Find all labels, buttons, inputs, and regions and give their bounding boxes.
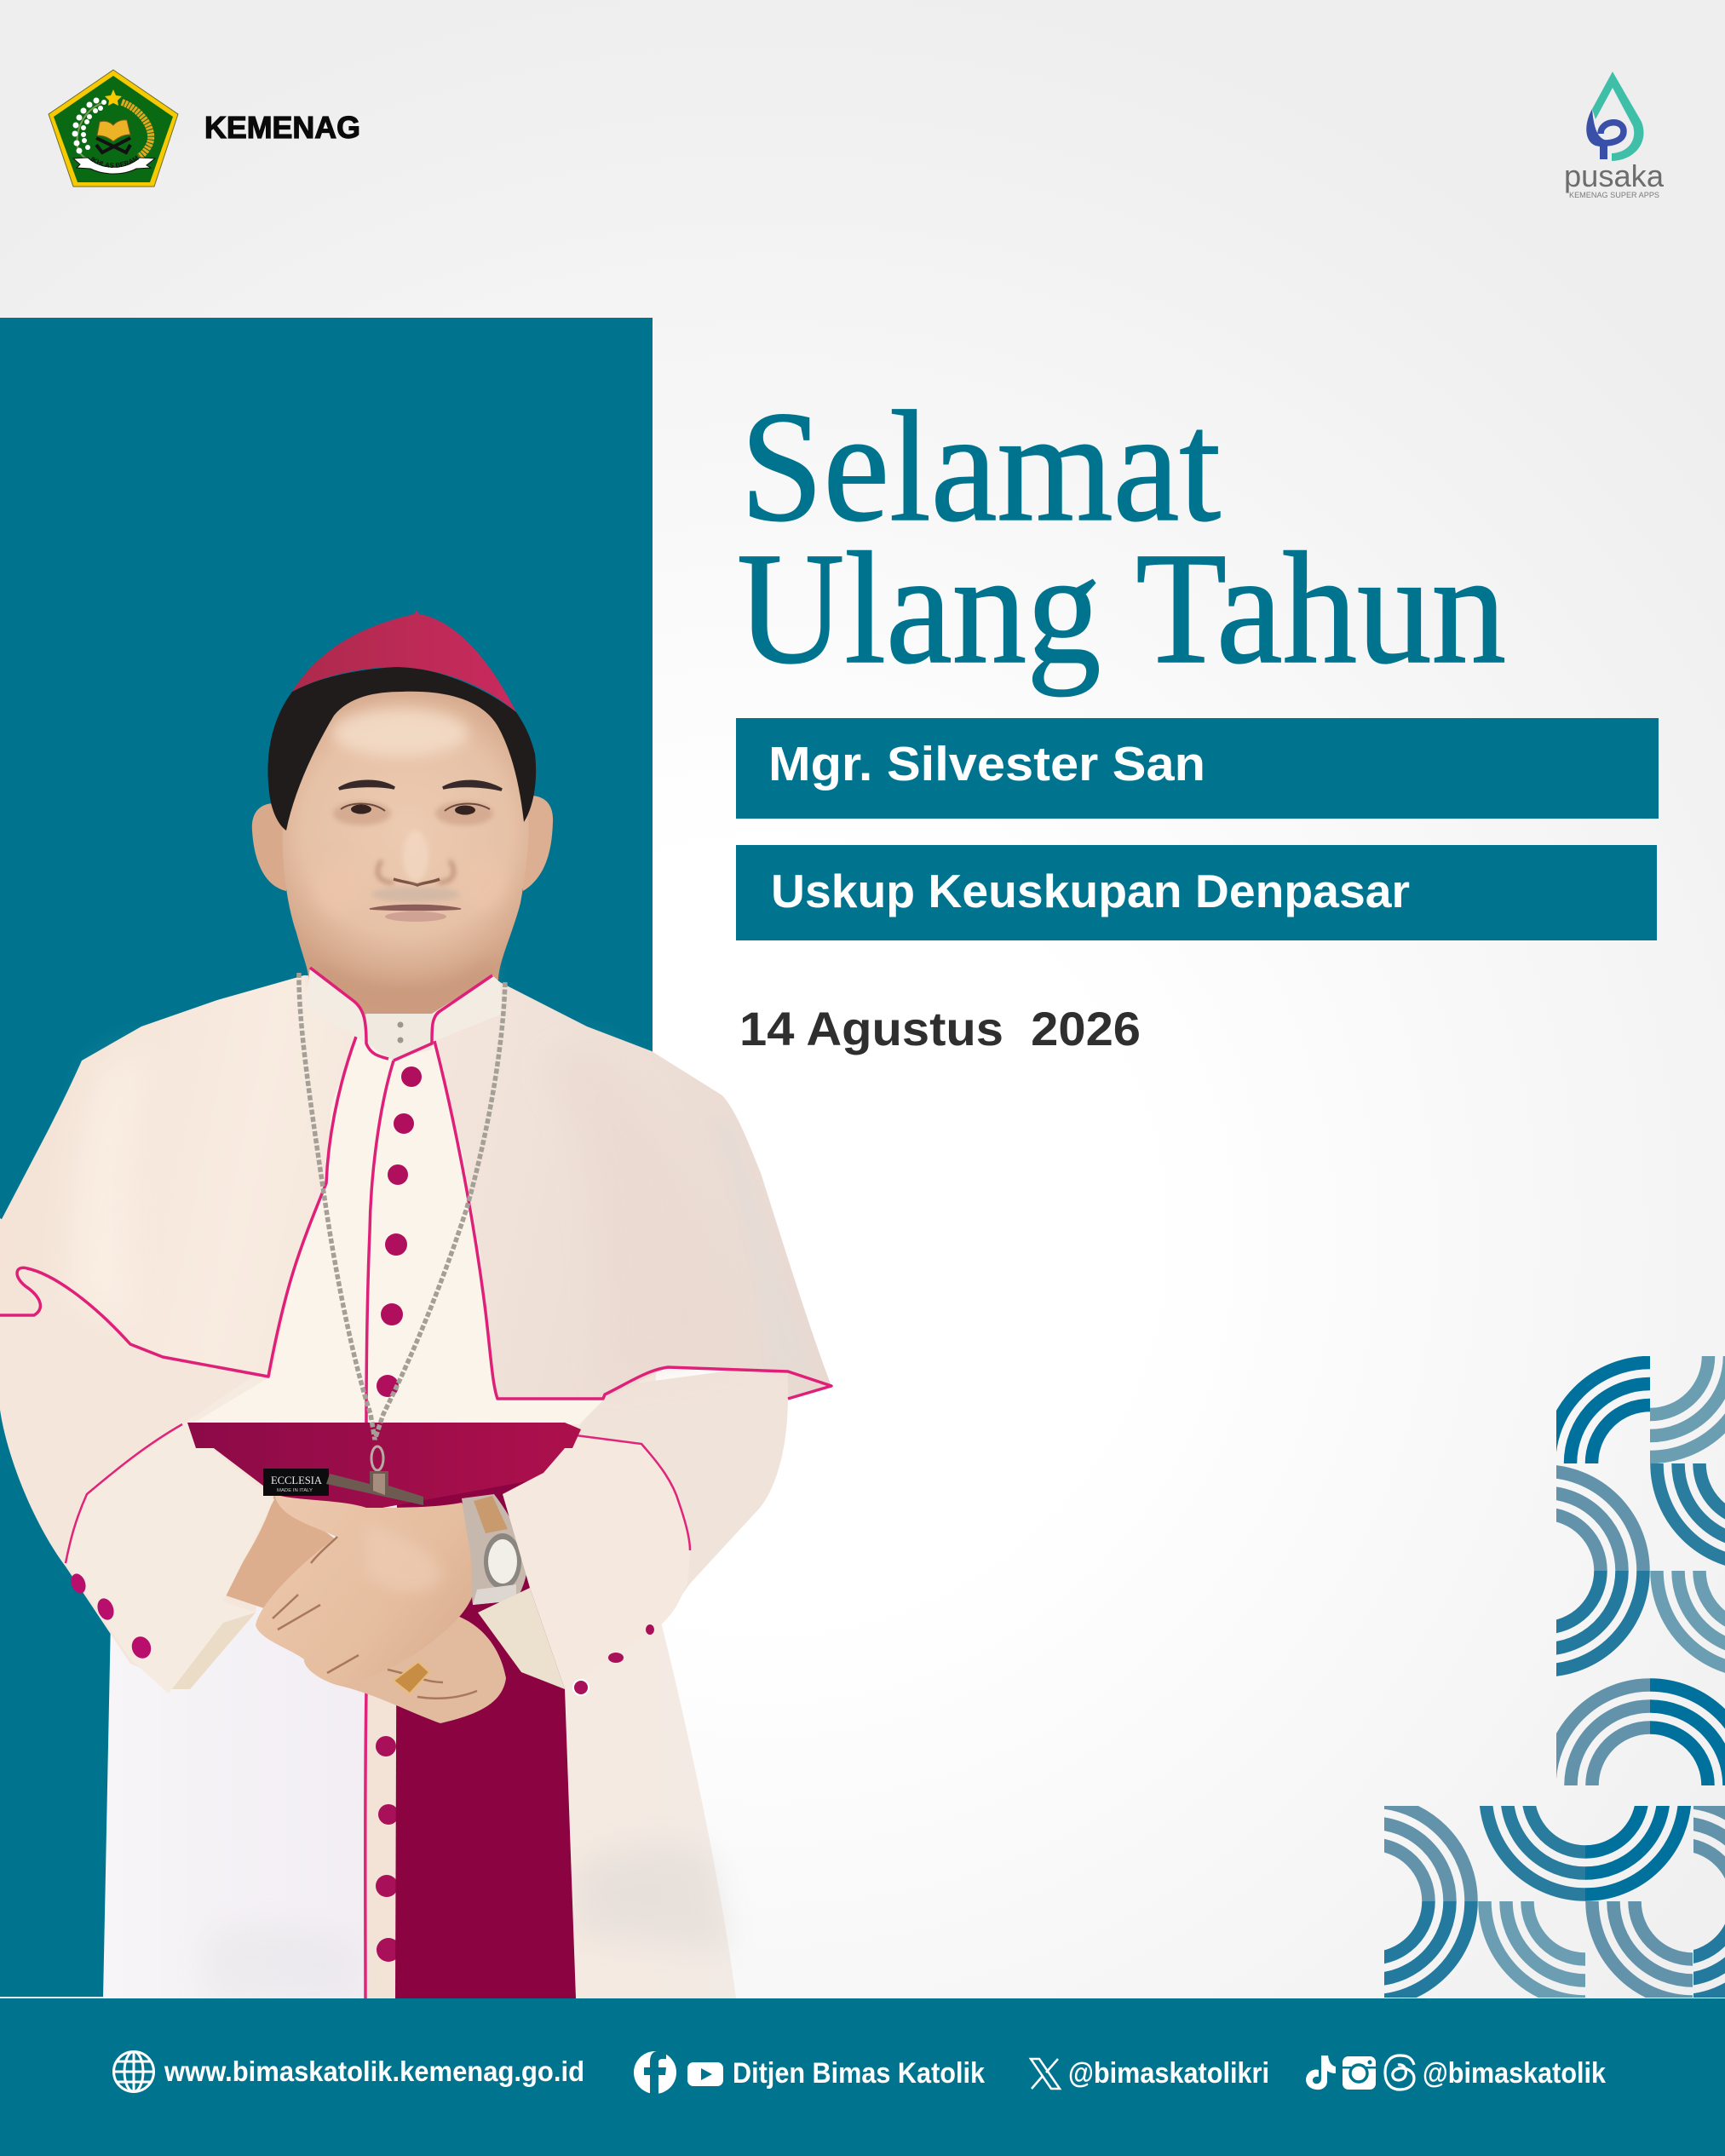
role bar: Uskup Keuskupan Denpasar: [736, 845, 1657, 940]
decoration: upper arc pattern: [1556, 1356, 1725, 1785]
cassock skirt: [103, 1397, 736, 1998]
label tag: MADE IN ITALY: [277, 1488, 313, 1493]
hair: [267, 667, 536, 831]
name bar: Mgr. Silvester San: Mgr. Silvester San: [768, 737, 1205, 791]
label tag: ECCLESIA: [271, 1474, 323, 1486]
icon: globe: [113, 2051, 154, 2092]
footer text: handle: @bimaskatolik: [1423, 2057, 1606, 2090]
icon: Threads: [1385, 2055, 1414, 2090]
footer text: X handle: @bimaskatolikri: [1068, 2057, 1269, 2090]
right cuff: [478, 1435, 690, 1695]
pectoral chain and cross: [299, 973, 505, 1505]
panel: teal photo backdrop: [0, 318, 653, 1998]
title: Selamat Ulang Tahun: Selamat: [740, 379, 1221, 555]
icon: TikTok: [1306, 2055, 1336, 2090]
ears: [252, 796, 553, 891]
name bar: Mgr. Silvester San: [736, 718, 1659, 819]
upper hand: [256, 1494, 478, 1699]
wristwatch: [462, 1494, 527, 1605]
footer text: Ditjen Bimas Katolik: Ditjen Bimas Katolik: [733, 2057, 985, 2090]
cassock front: [192, 1037, 605, 1424]
cap: [292, 610, 516, 712]
panel: footer bar: [0, 1997, 1725, 2156]
sash band overlay: [187, 1423, 581, 1448]
title: Selamat Ulang Tahun: [737, 379, 1506, 697]
left cuff: [66, 1424, 274, 1693]
role bar: Uskup Keuskupan Denpasar: Uskup Keuskupan Denpasar: [771, 865, 1410, 917]
heading: KEMENAG: KEMENAG: [204, 110, 360, 145]
collar: [305, 968, 503, 1061]
icon: YouTube: [687, 2062, 723, 2086]
right sleeve: [545, 1363, 788, 1625]
left sleeve: [0, 1218, 274, 1689]
date: 14 Agustus 2026: [739, 1002, 1141, 1055]
cape piping: [0, 1037, 831, 1399]
lower hand: [336, 1612, 506, 1723]
ring: [394, 1662, 429, 1693]
label tag: [263, 1469, 329, 1496]
icon: X: [1031, 2059, 1060, 2089]
buttons: [377, 1067, 422, 1397]
logo: Kemenag emblem: [48, 69, 179, 187]
decoration: lower arc pattern: [1384, 1806, 1725, 1998]
cape: [0, 975, 831, 1399]
footer text: website: www.bimaskatolik.kemenag.go.id: [164, 2055, 584, 2087]
face: [283, 683, 529, 1018]
icon: Facebook: [634, 2051, 676, 2094]
logo: Pusaka: [1564, 72, 1665, 200]
sash: [187, 1423, 581, 1998]
logo: Pusaka: KEMENAG SUPER APPS: [1569, 191, 1659, 200]
torso base: [145, 1337, 656, 1448]
title: Selamat Ulang Tahun: Ulang Tahun: [737, 519, 1506, 697]
icon: Instagram: [1343, 2056, 1376, 2090]
logo: Pusaka: pusaka: [1564, 158, 1665, 193]
illustration: bishop portrait: [0, 610, 831, 1998]
forearm: [223, 1494, 338, 1612]
placket piping: [366, 1061, 394, 1423]
